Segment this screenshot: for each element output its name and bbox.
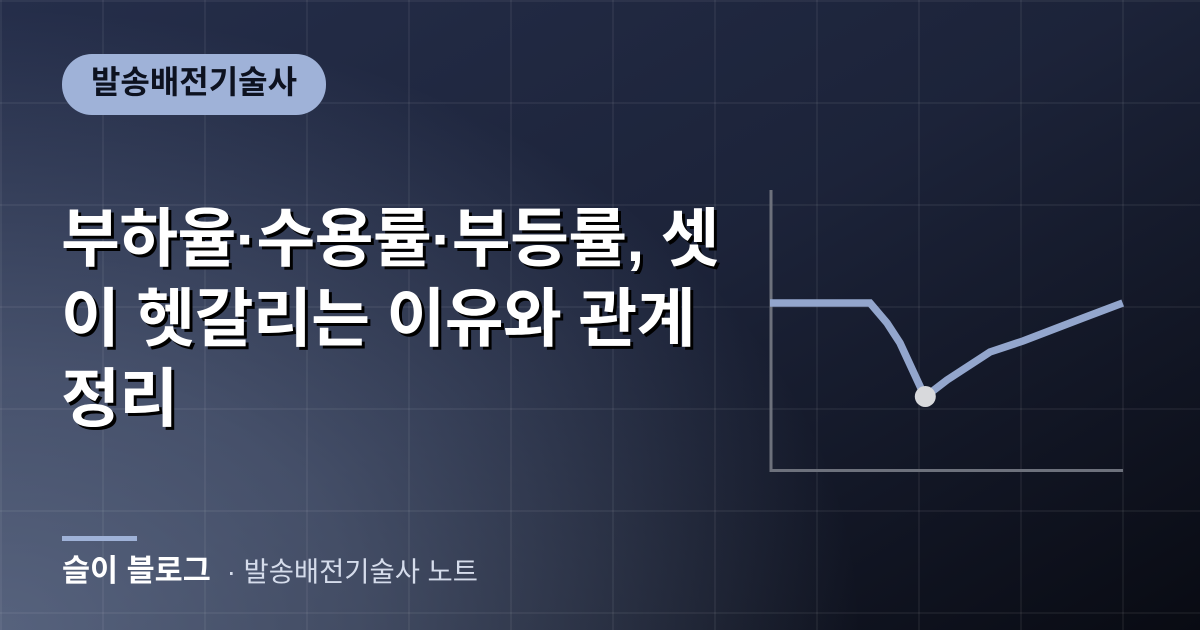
minimum point [915,386,936,407]
axes [771,190,1123,470]
badge: category pill: 발송배전기술사 [91,64,297,100]
footer: 슬이 블로그 · 발송배전기술사 노트 [62,554,478,588]
accent rule [62,536,137,541]
curve [770,303,1123,397]
title [61,203,720,435]
title: 정리 [61,363,177,435]
title: 부하율·수용률·부등률, 셋 [61,203,719,275]
title: 이 헷갈리는 이유와 관계 [61,283,695,355]
badge: category pill [62,54,326,115]
